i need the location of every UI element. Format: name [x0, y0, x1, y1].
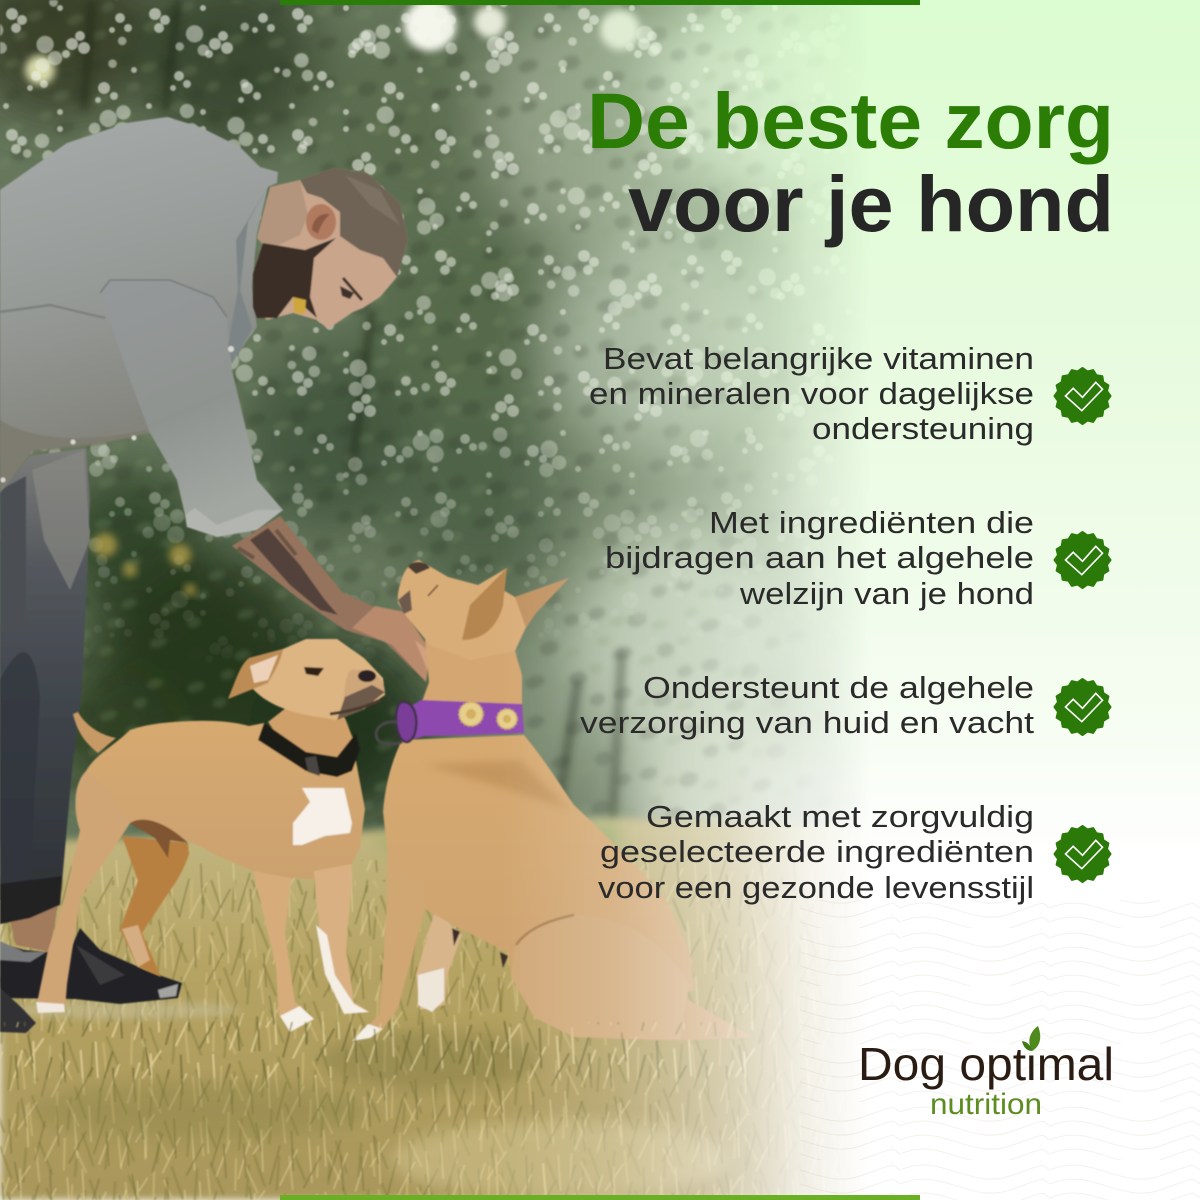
small dog [36, 639, 385, 1032]
icon: check badge 3 [1054, 679, 1110, 735]
benefit 4 text: Gemaakt met zorgvuldig [646, 799, 1034, 834]
logo: Dog optimal nutrition: nutrition [930, 1088, 1042, 1121]
front leg [370, 848, 425, 1030]
body [80, 721, 365, 881]
benefit 2 text: bijdragen aan het algehele [605, 540, 1034, 575]
icon: check badge 4 [1054, 826, 1110, 882]
head [249, 639, 385, 720]
photo background: trees [0, 0, 850, 900]
benefit 4 text [598, 799, 1034, 905]
neck [420, 640, 522, 704]
benefit 1 text [589, 341, 1034, 446]
foreground grass over paws [0, 1022, 760, 1078]
icon: check badge 2 [1054, 532, 1110, 588]
man: shirt [0, 117, 283, 537]
ankle [9, 905, 58, 952]
hind leg [37, 770, 119, 1008]
benefit 3 text [580, 670, 1034, 740]
purple collar [412, 699, 524, 740]
benefit 3 text: Ondersteunt de algehele [643, 670, 1034, 705]
benefit 1 text: Bevat belangrijke vitaminen [603, 341, 1034, 376]
title: voor je hond [628, 159, 1114, 248]
near shoe [0, 988, 36, 1033]
far shoe [0, 928, 182, 1004]
head [396, 559, 526, 652]
front legs [314, 864, 369, 1012]
pants [0, 448, 90, 924]
benefit 2 text: Met ingrediënten die [709, 505, 1034, 540]
benefit 2 text: welzijn van je hond [739, 576, 1034, 611]
benefit list [580, 341, 1110, 905]
tail [73, 712, 116, 753]
shirt sleeve [116, 312, 284, 526]
photo: man with two dogs in a park [0, 0, 850, 1200]
benefit 3 text: verzorging van huid en vacht [580, 705, 1034, 740]
far leg [416, 910, 462, 1010]
photo background: grass field [0, 812, 850, 1200]
body [383, 735, 752, 1040]
man: tattooed forearm and hand [232, 516, 431, 682]
benefit 4 text: voor een gezonde levensstijl [598, 870, 1034, 905]
bottom accent bar [280, 1195, 920, 1200]
white chest [293, 788, 352, 845]
logo: Dog optimal nutrition: Dog optimal [858, 1038, 1114, 1090]
top accent bar [280, 0, 920, 5]
collar [258, 723, 360, 777]
benefit 1 text: ondersteuning [812, 411, 1034, 446]
title [587, 76, 1114, 248]
icon: check badge 1 [1054, 368, 1110, 424]
title: De beste zorg [587, 76, 1114, 165]
man: pants and shoes [0, 448, 182, 1033]
benefit 1 text: en mineralen voor dagelijkse [589, 376, 1034, 411]
big dog [352, 560, 752, 1041]
icon: leaf [1022, 1026, 1040, 1051]
far hind leg [120, 836, 189, 977]
benefit 4 text: geselecteerde ingrediënten [600, 834, 1034, 869]
man: head with beard [253, 168, 408, 329]
neck [267, 708, 354, 758]
background wave pattern [800, 900, 1200, 1200]
logo: Dog optimal nutrition [858, 1026, 1114, 1121]
benefit 2 text [605, 505, 1034, 611]
teats [452, 928, 460, 946]
